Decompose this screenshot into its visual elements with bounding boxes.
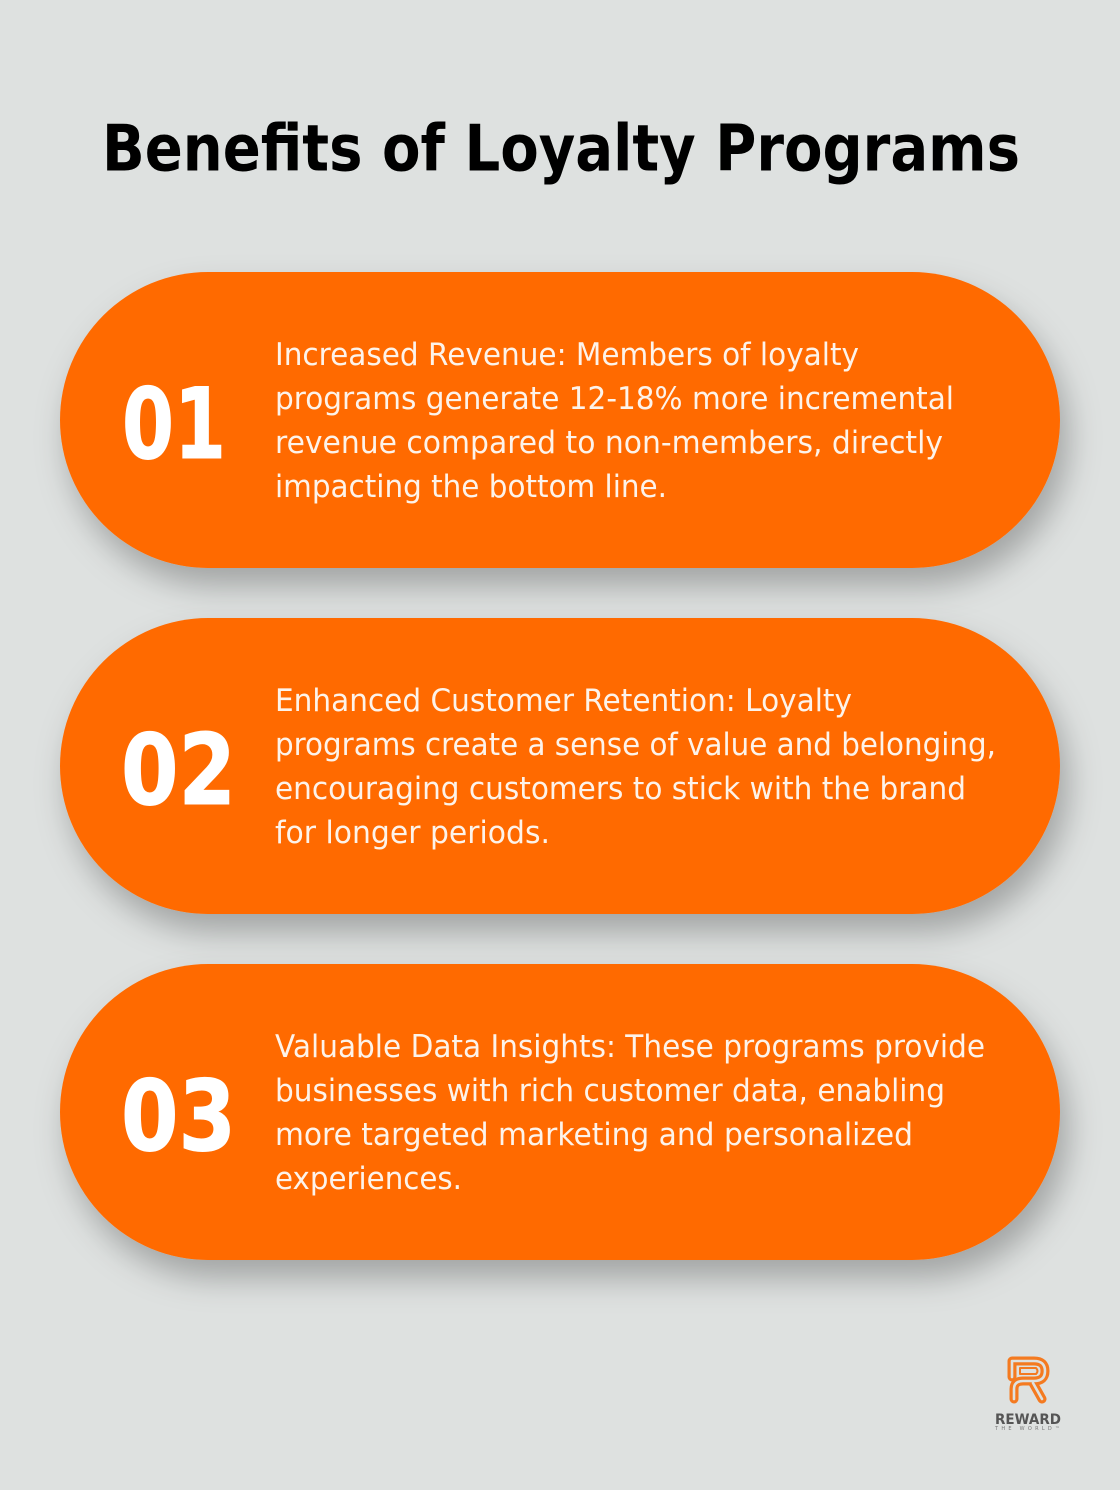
panel text: more targeted marketing and personalized [275,1117,913,1153]
logo tagline: THE WORLD™ [994,1426,1060,1432]
panel text [275,1029,985,1197]
panel text: businesses with rich customer data, enabling [275,1073,945,1109]
panel text [275,337,954,505]
panel text: Valuable Data Insights: These programs provide [275,1029,985,1065]
panel background [60,272,1060,568]
panel background [60,964,1060,1260]
panel text: for longer periods. [275,815,550,851]
logo: Reward the World [994,1361,1061,1432]
panel text: Increased Revenue: Members of loyalty [275,337,859,373]
number 02: 02 [121,714,236,828]
panel text: impacting the bottom line. [275,469,667,505]
logo wordmark: REWARD [995,1412,1061,1428]
panel text: experiences. [275,1161,462,1197]
title: Benefits of Loyalty Programs [102,112,1020,186]
panel text: programs create a sense of value and belonging, [275,727,996,763]
panel: data insights [60,964,1060,1260]
panel: customer retention [60,618,1060,914]
panel text: encouraging customers to stick with the brand [275,771,966,807]
number 03: 03 [121,1060,236,1174]
icon: R mark [1012,1361,1045,1399]
panel text: revenue compared to non-members, directly [275,425,943,461]
panel text: Enhanced Customer Retention: Loyalty [275,683,852,719]
number 01: 01 [122,368,226,482]
panel background [60,618,1060,914]
panel text [275,683,996,851]
panel: increased revenue [60,272,1060,568]
panel text: programs generate 12-18% more incremental [275,381,954,417]
